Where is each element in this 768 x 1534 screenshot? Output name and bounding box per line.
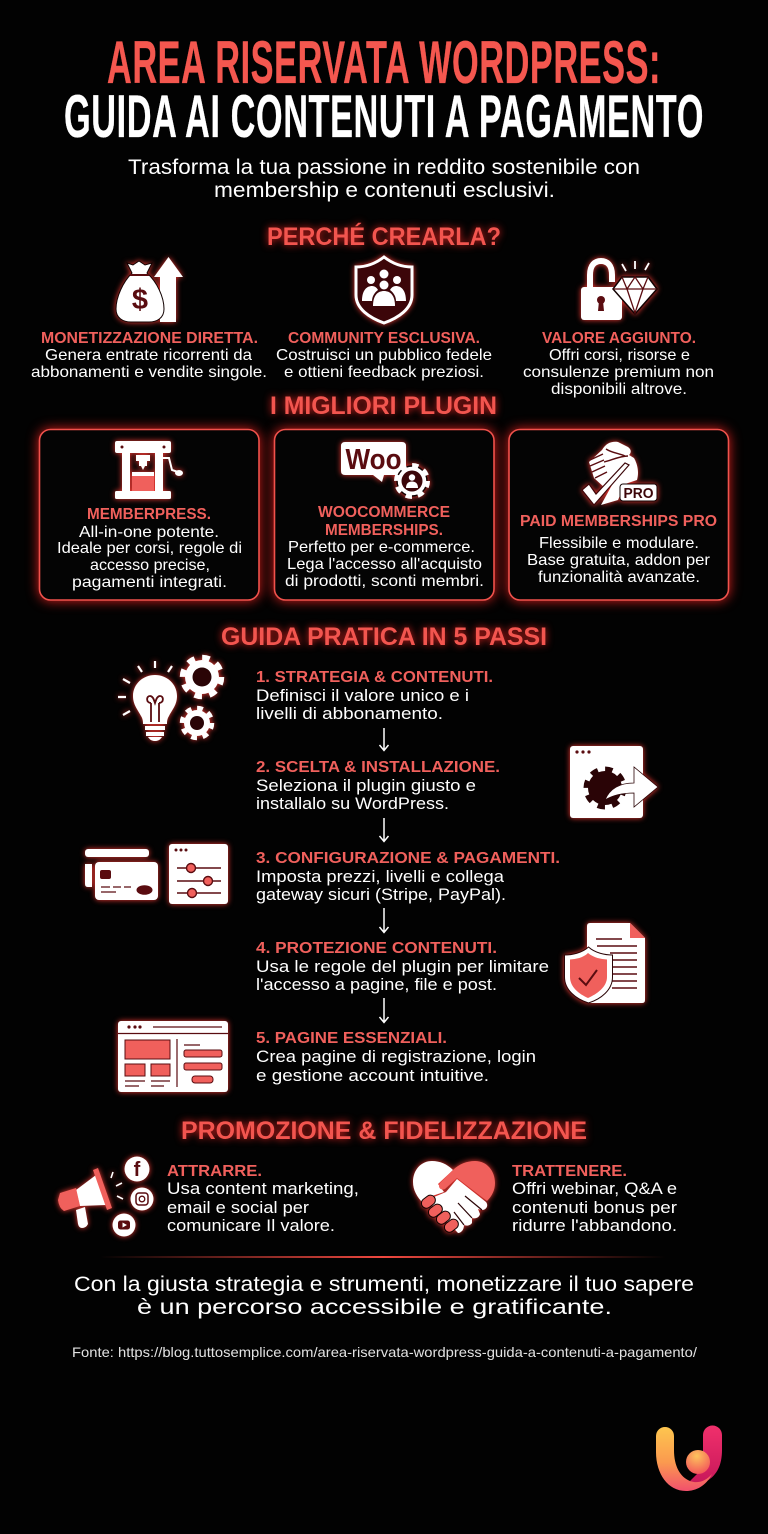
panel: paid memberships pro: Flessibile e modulare. [539, 535, 699, 552]
icon: woo bubble with gear [341, 442, 428, 497]
step 1: 1. STRATEGIA & CONTENUTI. [256, 669, 493, 686]
step 4: l'accesso a pagine, file e post. [256, 976, 497, 994]
panel: memberpress: MEMBERPRESS. [87, 506, 211, 523]
icon: lock and diamond [581, 261, 657, 320]
panel: trattenere [413, 1161, 678, 1235]
icon: money bag with arrow [116, 257, 183, 322]
arrow 4 to 5 [380, 998, 388, 1022]
step 3: 3. CONFIGURAZIONE & PAGAMENTI. [256, 850, 560, 867]
panel: monetizzazione diretta [31, 257, 267, 381]
closing statement [74, 1272, 694, 1319]
panel: woocommerce memberships [274, 430, 494, 600]
panel: memberpress: All-in-one potente. [79, 524, 219, 541]
panel: community esclusiva: COMMUNITY ESCLUSIVA. [288, 330, 480, 347]
closing statement: Con la giusta strategia e strumenti, monetizzare il tuo sapere [74, 1272, 694, 1296]
panel: community esclusiva: e ottieni feedback preziosi. [284, 364, 484, 381]
panel: community esclusiva: Costruisci un pubblico fedele [276, 347, 492, 364]
panel: attrarre: email e social per [167, 1199, 310, 1217]
panel: woocommerce memberships: di prodotti, sconti membri. [285, 573, 484, 590]
panel: woocommerce memberships: MEMBERSHIPS. [325, 522, 443, 539]
icon: megaphone with social badges: f [134, 1159, 141, 1181]
icon: press machine [115, 441, 183, 499]
arrow 1 to 2 [380, 728, 388, 750]
step 5: Crea pagine di registrazione, login [256, 1048, 536, 1066]
icon: page layout window [118, 1021, 228, 1092]
icon: handshake check with pro badge: PRO [624, 485, 654, 502]
panel: monetizzazione diretta: abbonamenti e vendite singole. [31, 364, 267, 381]
icon: window with gear and arrow [570, 746, 658, 818]
panel: woocommerce memberships: Lega l'accesso all'acquisto [287, 556, 482, 573]
icon: heart handshake [413, 1161, 495, 1234]
panel: paid memberships pro: PAID MEMBERSHIPS PRO [520, 513, 717, 530]
subtitle: membership e contenuti esclusivi. [214, 178, 555, 202]
icon: credit cards and sliders [85, 844, 228, 904]
panel: valore aggiunto: disponibili altrove. [551, 381, 687, 398]
icon: document with shield [564, 923, 645, 1003]
heading: perché crearla: PERCHÉ CREARLA? [267, 222, 501, 251]
panel: valore aggiunto: Offri corsi, risorse e [549, 347, 690, 364]
step 2: Seleziona il plugin giusto e [256, 777, 476, 795]
panel: trattenere: contenuti bonus per [512, 1199, 678, 1217]
logo [656, 1426, 722, 1491]
step 2 [256, 759, 500, 813]
panel: memberpress: Ideale per corsi, regole di [57, 540, 242, 557]
icon: shield with people [356, 257, 412, 323]
step 5: 5. PAGINE ESSENZIALI. [256, 1030, 447, 1047]
step 1: Definisci il valore unico e i [256, 687, 469, 705]
panel: attrarre: ATTRARRE. [167, 1163, 262, 1180]
panel: woocommerce memberships: WOOCOMMERCE [318, 504, 450, 521]
panel: memberpress: accesso precise, [90, 557, 210, 574]
icon: handshake check with pro badge [582, 442, 657, 505]
panel: monetizzazione diretta: MONETIZZAZIONE DIRETTA. [41, 330, 258, 347]
panel: monetizzazione diretta: Genera entrate ricorrenti da [45, 347, 252, 364]
panel: valore aggiunto [523, 261, 714, 398]
step 4 [256, 940, 549, 994]
heading: promozione: PROMOZIONE & FIDELIZZAZIONE [181, 1117, 587, 1145]
step 3 [256, 850, 560, 904]
icon: woo bubble with gear: Woo [346, 444, 402, 476]
panel: valore aggiunto: VALORE AGGIUNTO. [542, 330, 696, 347]
heading: migliori plugin: I MIGLIORI PLUGIN [270, 392, 497, 420]
panel: trattenere: ridurre l'abbandono. [512, 1217, 677, 1235]
step 3: Imposta prezzi, livelli e collega [256, 868, 505, 886]
step 4: 4. PROTEZIONE CONTENUTI. [256, 940, 497, 957]
step 2: installalo su WordPress. [256, 795, 449, 813]
panel: attrarre: comunicare Il valore. [167, 1217, 335, 1235]
closing statement: è un percorso accessibile e gratificante. [137, 1295, 612, 1319]
panel: memberpress [40, 430, 259, 600]
panel: paid memberships pro: funzionalità avanzate. [538, 569, 700, 586]
panel: paid memberships pro [509, 430, 728, 600]
arrow 2 to 3 [380, 818, 388, 842]
panel: paid memberships pro: Base gratuita, addon per [527, 552, 711, 569]
panel: woocommerce memberships: Perfetto per e-commerce. [288, 539, 475, 556]
icon: money bag with arrow: $ [132, 284, 148, 316]
panel: trattenere: TRATTENERE. [512, 1163, 627, 1180]
icon: bulb and gears [118, 658, 222, 741]
panel: valore aggiunto: consulenze premium non [523, 364, 714, 381]
arrow 3 to 4 [380, 908, 388, 932]
panel: attrarre [58, 1156, 359, 1236]
icon: megaphone with social badges [58, 1156, 154, 1236]
source line: Fonte: https://blog.tuttosemplice.com/area-riservata-wordpress-guida-a-contenuti-a-pagamento/ [72, 1344, 697, 1360]
subtitle [128, 155, 640, 202]
heading: guida pratica: GUIDA PRATICA IN 5 PASSI [221, 623, 547, 651]
step 2: 2. SCELTA & INSTALLAZIONE. [256, 759, 500, 776]
step 1 [256, 669, 493, 723]
step 5 [256, 1030, 536, 1085]
panel: community esclusiva [276, 257, 492, 381]
step 1: livelli di abbonamento. [256, 705, 443, 723]
title [64, 29, 704, 150]
panel: attrarre: Usa content marketing, [167, 1180, 359, 1198]
step 5: e gestione account intuitive. [256, 1067, 489, 1085]
panel: memberpress: pagamenti integrati. [72, 574, 227, 591]
step 4: Usa le regole del plugin per limitare [256, 958, 549, 976]
panel: trattenere: Offri webinar, Q&A e [512, 1180, 677, 1198]
step 3: gateway sicuri (Stripe, PayPal). [256, 886, 506, 904]
subtitle: Trasforma la tua passione in reddito sostenibile con [128, 155, 640, 179]
